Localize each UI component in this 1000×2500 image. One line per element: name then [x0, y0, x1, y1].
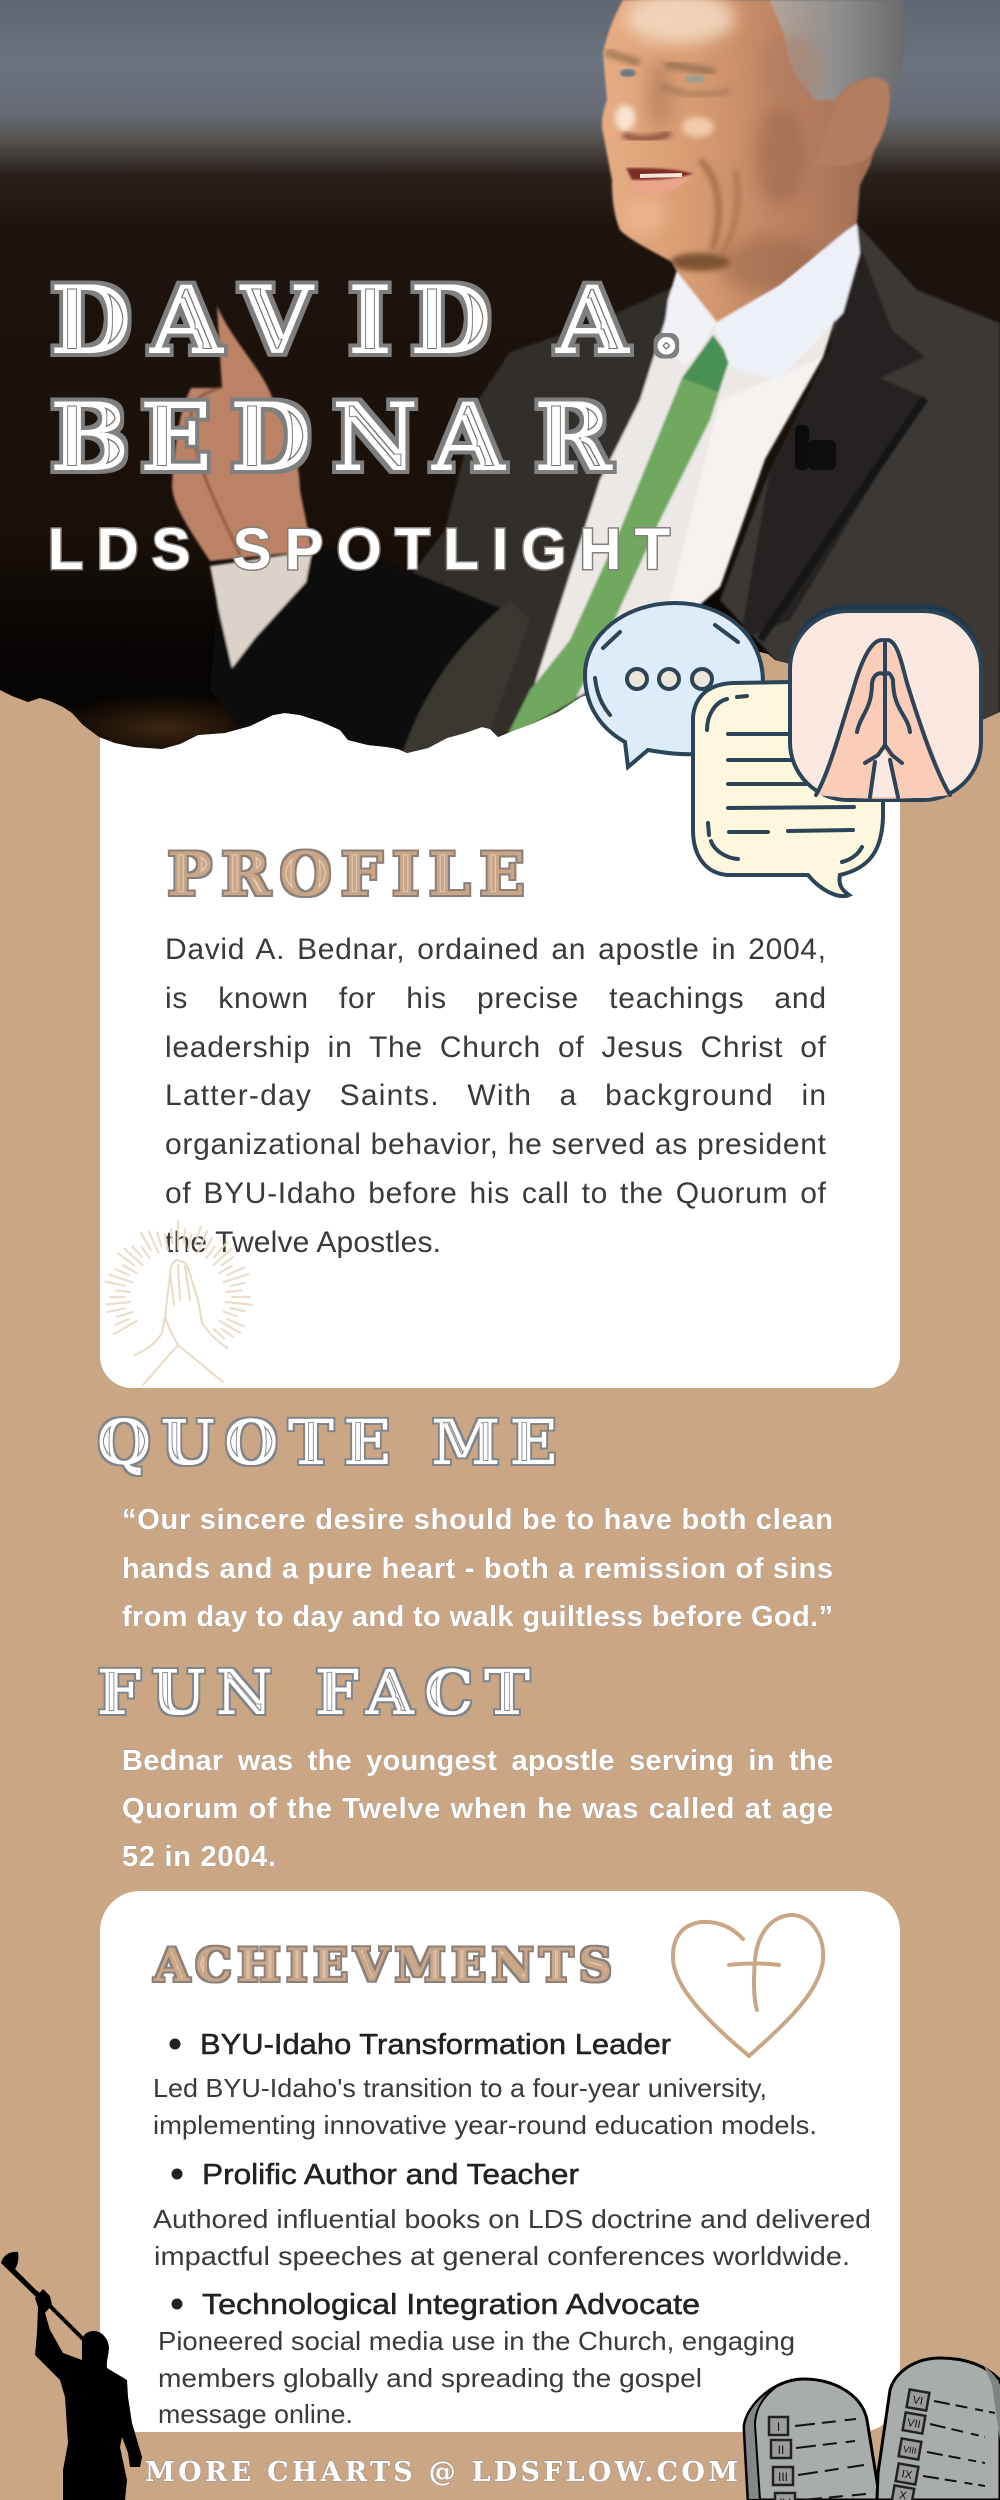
icon: blue speech bubble — [585, 603, 763, 767]
hair — [770, 0, 905, 100]
achievement 3: Technological Integration Advocate — [202, 2289, 700, 2321]
subtitle: LDS Spotlight: LDS SPOTLIGHT — [48, 517, 670, 582]
neck and face — [602, 0, 903, 322]
achievement 1: implementing innovative year-round education models. — [153, 2110, 817, 2140]
text block: profile: organizational behavior, he served as president — [165, 1128, 827, 1161]
achievement 3 — [158, 2289, 795, 2429]
ear — [838, 77, 891, 165]
achievement 1 — [153, 2029, 817, 2140]
text block: profile: leadership in The Church of Jesus Christ of — [165, 1031, 827, 1064]
achievement 3: message online. — [158, 2399, 353, 2429]
heading: Fun Fact: FUN FACT — [97, 1656, 530, 1729]
panel: profile card — [100, 690, 900, 1388]
achievement 2: impactful speeches at general conferences worldwide. — [154, 2241, 850, 2271]
text block: quote: “Our sincere desire should be to have both clean — [122, 1504, 833, 1536]
achievement 2: Prolific Author and Teacher — [202, 2159, 579, 2191]
icon: stone tablet right: VIII — [902, 2444, 917, 2456]
text block: quote — [122, 1504, 833, 1633]
text block: profile — [165, 933, 827, 1259]
footer: more charts: MORE CHARTS @ LDSFLOW.COM — [145, 2457, 738, 2488]
tie — [505, 335, 730, 740]
text block: fun fact: Quorum of the Twelve when he was called at age — [122, 1793, 833, 1825]
hero photo — [0, 0, 1000, 762]
icon: stone tablet right: IX — [901, 2468, 914, 2482]
icon: praying hands square — [790, 604, 981, 800]
icon: small praying hands with rays — [106, 1221, 252, 1385]
title: David A. Bednar: BEDNAR — [50, 383, 613, 493]
panel: achievements card — [100, 1891, 900, 2432]
icon: stone tablet left: II — [778, 2443, 784, 2457]
achievement 1: BYU-Idaho Transformation Leader — [200, 2029, 671, 2061]
achievement 3: members globally and spreading the gospel — [158, 2363, 702, 2393]
achievement 2: Authored influential books on LDS doctrine and delivered — [153, 2204, 871, 2234]
cuff — [210, 551, 312, 668]
achievement 1: Led BYU-Idaho's transition to a four-year university, — [153, 2073, 767, 2103]
icon: stone tablet left: III — [778, 2470, 788, 2484]
text block: quote: from day to day and to walk guiltless before God.” — [122, 1601, 833, 1633]
text block: fun fact — [122, 1745, 833, 1873]
icon: stone tablet right: VII — [906, 2417, 921, 2431]
icon: stone tablet left — [744, 2379, 880, 2500]
icon: stone tablet right — [877, 2358, 1000, 2500]
icon: stone tablet right: VI — [912, 2394, 924, 2408]
text block: profile: Latter-day Saints. With a background in — [165, 1079, 826, 1112]
text block: profile: the Twelve Apostles. — [165, 1226, 441, 1259]
heading: Profile: PROFILE — [167, 840, 525, 910]
heading: Achievments: ACHIEVMENTS — [153, 1938, 612, 1992]
text block: fun fact: Bednar was the youngest apostle serving in the — [122, 1745, 833, 1777]
text block: profile: is known for his precise teachings and — [165, 982, 826, 1015]
dark forearm — [210, 546, 500, 752]
shirt highlight — [670, 358, 822, 604]
collar — [662, 270, 715, 365]
text block: profile: of BYU-Idaho before his call to the Quorum of — [165, 1177, 827, 1210]
jacket right — [720, 222, 1000, 730]
achievement 2 — [153, 2159, 871, 2271]
text block: fun fact: 52 in 2004. — [122, 1841, 276, 1873]
face modelling — [605, 0, 820, 293]
title: David A. Bednar — [50, 266, 683, 493]
icon: stone tablet left: I — [777, 2420, 780, 2434]
shirt — [533, 290, 836, 700]
text block: quote: hands and a pure heart - both a remission of sins — [122, 1553, 833, 1585]
heading: Quote Me: QUOTE ME — [97, 1406, 557, 1479]
jacket left — [412, 287, 672, 737]
icon: yellow speech bubble — [693, 681, 883, 896]
icon: trumpeter silhouette — [1, 2252, 142, 2500]
achievement 3: Pioneered social media use in the Church, engaging — [158, 2326, 795, 2356]
text block: profile: David A. Bednar, ordained an apostle in 2004, — [165, 933, 826, 966]
title: David A. Bednar: DAVIDA. — [50, 266, 683, 376]
icon: heart with cross — [673, 1915, 823, 2056]
hand — [172, 306, 312, 561]
list: achievements — [153, 2029, 871, 2429]
